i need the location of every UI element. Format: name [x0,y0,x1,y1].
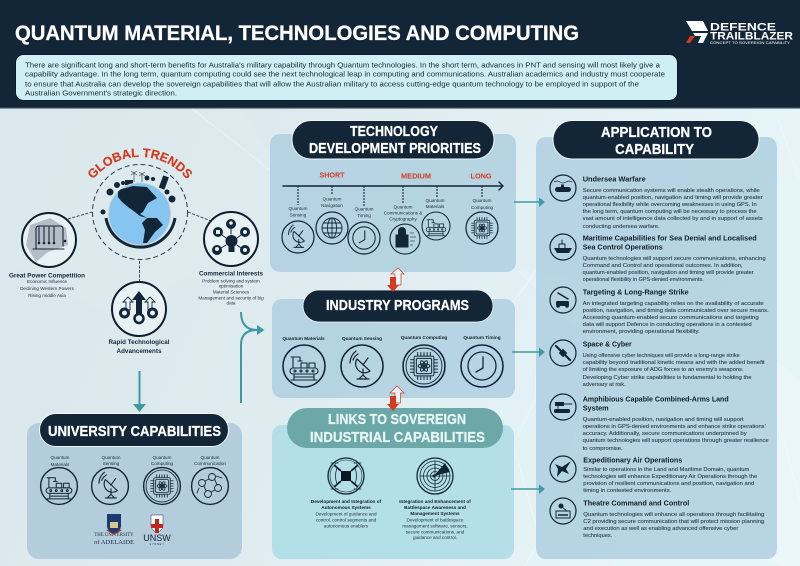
text: autonomous systems: Development of guidance and [315,512,377,516]
item: quantum timing [461,335,503,387]
item: quantum timing: Quantum [355,206,374,212]
item: theatre command and control: C2 providing secure communication that will protect mission planning [583,519,764,525]
item: undersea warfare: Secure communication systems will enable stealth operations, while [583,188,760,194]
item: targeting and long-range strike: Accessing quantum-enabled secure communications and targeting [583,315,759,321]
panel: technology development priorities [270,120,516,272]
heading pill: CAPABILITY [615,142,694,158]
heading pill: TECHNOLOGY [350,124,438,140]
icon: ship [550,234,576,260]
panel: links to sovereign industrial capabilities [272,408,514,559]
item: maritime capabilities: Maritime Capabilities for Sea Denial and Localised [583,234,757,242]
item: quantum computing [401,335,447,387]
item: amphibious combined-arms land system: Quantum-enabled position, navigation and timing will support [583,417,744,423]
item: expeditionary air operations: technologies will enhance Expeditionary Air Operations through the [583,474,757,480]
rapid technological advancements: Rapid Technological [108,339,170,346]
icon: quantum sensing [92,455,128,504]
item: quantum sensing: Quantum Sensing [342,336,382,341]
icon: quantum computing [144,455,180,504]
logo: Defence Trailblazer: TRAILBLAZER [710,30,793,42]
item: targeting and long-range strike: data will support Defence in conducting operations in a contested [583,322,752,328]
item: theatre command and control [550,498,764,539]
icon: quantum materials [41,455,77,504]
icon: quantum communication [192,455,228,504]
timeline arrow: MEDIUM [401,174,431,180]
item: amphibious combined-arms land system: operations in GPS-denied environments and enhance strike operations' [583,424,766,430]
arrows: industry programs and sovereign capabilities [387,386,404,411]
item: targeting and long-range strike: environment, providing operational flexibility. [583,329,700,335]
commercial interests: data [227,300,236,306]
heading: global trends arc: GLOBAL TRENDS [88,148,192,178]
logo: university of adelaide: of ADELAIDE [94,539,134,546]
heading pill: INDUSTRIAL CAPABILITIES [310,430,485,446]
item: space and cyber: Using offensive cyber techniques will provide a long-range strike [583,353,740,359]
item: maritime capabilities: Sea Control Operations [583,242,663,252]
panel: university capabilities [27,414,242,559]
icon: land vehicles [550,394,576,420]
text: battlespace awareness: Development of battlespace [407,518,464,522]
text: battlespace awareness [399,499,471,540]
arrows: priorities and industry programs [387,268,404,292]
item: theatre command and control: techniques. [583,533,613,539]
item: targeting and long-range strike [550,287,769,335]
rapid technological advancements: Advancements [116,348,162,355]
arrow: industry programs to application [512,348,545,357]
logo: Defence Trailblazer: DEFENCE [710,22,776,34]
item: quantum navigation: Quantum [323,196,342,202]
item: quantum materials [422,198,450,240]
logo: Defence Trailblazer [686,21,793,45]
item: quantum navigation: Navigation [321,203,343,208]
commercial interests: Material Sciences [213,290,250,294]
logo: university of adelaide [94,514,134,546]
item: space and cyber: adversary at risk. [583,382,626,388]
icon: radar [417,458,453,494]
title: QUANTUM MATERIAL, TECHNOLOGIES AND COMPUTING [15,21,579,45]
heading pill [287,408,503,448]
item: quantum timing [348,206,380,254]
text: battlespace awareness: guidance and control. [413,535,457,540]
heading pill [553,120,759,159]
commercial interests: Problem solving and system [202,278,260,284]
icon: quantum communication: Quantum [201,455,220,460]
icon: missile launcher [550,287,576,313]
text: battlespace awareness: Management Systems [410,511,460,516]
item: quantum sensing [341,336,383,387]
arrow: sovereign capabilities to application [511,484,545,494]
heading pill [303,290,493,322]
item: quantum communications and cryptography [384,204,422,254]
item: space and cyber: Developing Cyber strike capabilities is fundamental to holding the [583,375,752,381]
intro text box: to ensure that Australia can develop the sovereign capabilities that will allow the Australian military to access cutting-edge quantum technology to be employed in support of the [25,80,639,88]
item: targeting and long-range strike: An integrated targeting capability relies on the availability of accurate [583,301,764,307]
item: quantum sensing [282,206,314,253]
rapid technological advancements [108,282,170,355]
arrow: trends and universities to industry programs [241,312,264,403]
item: undersea warfare: conducting undersea warfare. [583,224,660,230]
item: theatre command and control: and execution as well as enabling advanced offensive cyber [583,526,738,532]
heading pill: LINKS TO SOVEREIGN [328,412,466,428]
commercial interests [198,212,264,306]
item: amphibious combined-arms land system: accuracy. Additionally, secure communications underpinned by [583,431,747,437]
icon: quantum communication: Communication [194,461,226,466]
item: targeting and long-range strike: position, navigation, and timing data communicated over secure means. [583,308,769,314]
text: autonomous systems: Development and Integration of [311,499,382,504]
heading pill: DEVELOPMENT PRIORITIES [309,141,481,157]
item: quantum sensing: Sensing [290,212,307,218]
item: maritime capabilities: operational flexibility in GPS-denied environments. [583,277,704,283]
item: quantum materials: Quantum [426,198,445,203]
item: quantum computing: Computing [471,205,494,210]
text: battlespace awareness: Battlespace Awareness and [404,505,466,510]
logo: university of adelaide: THE UNIVERSITY [94,533,134,538]
arrow: trends to university capabilities [133,371,146,412]
intro text box [16,54,678,100]
logo: UNSW [143,515,171,546]
item: quantum timing: Timing [357,213,371,218]
item: undersea warfare: vast amount of intelligence data collected by and in support of assets [583,216,763,222]
item: quantum communications and cryptography: Quantum [394,204,413,210]
item: expeditionary air operations: Expeditionary Air Operations [583,456,682,464]
icon: quantum materials: Quantum [51,455,70,460]
item: quantum materials: Quantum Materials [282,336,325,341]
timeline arrow: SHORT [320,172,345,180]
great power competition: Declining Western Powers [20,286,75,291]
item: quantum computing [466,198,498,244]
great power competition [9,213,85,298]
item: expeditionary air operations: timing in contested environments. [583,488,672,494]
text: battlespace awareness: Integration and Enhancement of [399,499,471,504]
item: amphibious combined-arms land system: quantum technologies will support operations through greater resilience [583,438,769,444]
item: space and cyber: Space & Cyber [583,340,632,348]
heading pill: INDUSTRY PROGRAMS [326,298,469,314]
logo: Defence Trailblazer: CONCEPT TO SOVEREIGN CAPABILITY [710,40,790,45]
great power competition: Great Power Competition [9,272,85,280]
item: theatre command and control: Quantum technologies will enhance all operations through facilitating [583,512,764,518]
item: expeditionary air operations: provision of resilient communications and position, navigation and [583,481,754,487]
globe icon [92,164,188,260]
logo: UNSW: SYDNEY [149,543,165,546]
intro text box: Australian Government's strategic direction. [25,88,177,98]
item: expeditionary air operations: Similar to operations in the Land and Maritime Domain, quantum [583,467,750,473]
item: quantum computing: Quantum Computing [401,335,447,340]
connector lines [68,212,211,281]
item: space and cyber [550,340,765,388]
intro text box: capability advantage. In the long term, quantum computing could see the next technological leap in computing and communications. Australian academics and industry must cooperate [25,70,665,78]
item: quantum timing: Quantum Timing [463,335,501,340]
item: quantum communications and cryptography: Cryptography [389,216,417,222]
item: theatre command and control: Theatre Command and Control [583,498,689,508]
item: space and cyber: capability beyond traditional kinetic means and with the added benefit [583,360,765,366]
item: undersea warfare [550,174,763,230]
panel: industry programs [272,290,515,398]
item: undersea warfare: the long term, quantum computing will be necessary to process the [583,209,757,215]
item: space and cyber: of limiting the exposure of ADG forces to an enemy's weapons. [583,367,744,373]
item: quantum materials [282,336,325,387]
arrow: technology priorities to application [514,198,545,207]
item: amphibious combined-arms land system: System [583,404,609,412]
icon: quantum sensing: Sensing [103,461,120,466]
icon: quantum sensing: Quantum [102,455,121,460]
icon: drone [328,458,364,494]
commercial interests: optimisation [219,284,244,288]
icon: submarine [550,175,576,201]
icon: command post [550,498,576,524]
icon: quantum computing: Quantum [153,455,172,460]
item: maritime capabilities [550,234,766,283]
icon: satellite [550,340,576,366]
icon: aircraft [550,456,576,482]
commercial interests: Commercial Interests [199,270,263,278]
great power competition: Economic Influence [27,279,67,284]
item: maritime capabilities: Command and Control and operational outcomes. In addition, [583,263,743,269]
item: quantum communications and cryptography: Communications & [384,210,422,216]
item: undersea warfare: operational flexibility while overcoming weaknesses in using GPS. In [583,202,757,208]
heading pill [40,414,228,446]
item: maritime capabilities: Quantum technologies will support secure communications, enhancing [583,256,766,262]
text: battlespace awareness: secure communications, and [406,530,465,534]
item: quantum materials: Materials [426,204,445,209]
item: undersea warfare: Undersea Warfare [583,174,646,184]
item: expeditionary air operations [550,456,757,494]
text: autonomous systems: control, control segments and [316,518,377,522]
item: amphibious combined-arms land system: Amphibious Capable Combined-Arms Land [583,394,729,404]
item: maritime capabilities: quantum-enabled position, navigation and timing will provide greater [583,270,754,276]
timeline arrow: LONG [470,174,492,180]
item: targeting and long-range strike: Targeting & Long-Range Strike [583,288,689,296]
great power competition: Rising middle Asia [28,293,66,298]
panel: application to capability [536,120,777,559]
item: quantum navigation [316,196,348,244]
text: autonomous systems: Autonomous Systems [321,505,371,510]
commercial interests: Management and security of big [198,296,264,300]
text: autonomous systems: autonomous enablers [324,524,369,528]
heading pill: UNIVERSITY CAPABILITIES [48,424,221,440]
item: amphibious combined-arms land system: to compromise. [583,446,623,452]
intro text box: There are significant long and short-term benefits for Australia's military capability through Quantum technologies. In the short term, advances in PNT and sensing will most likely give a [25,60,661,70]
icon: quantum materials: Materials [51,462,70,467]
logo: UNSW: UNSW [143,533,171,543]
header band [0,0,800,108]
item: undersea warfare: quantum-enabled position, navigation and timing will provide greater [583,195,763,201]
item: quantum computing: Quantum [473,198,492,203]
heading pill [292,120,494,159]
text: autonomous systems [311,499,382,528]
item: amphibious combined-arms land system [550,394,769,452]
heading pill: APPLICATION TO [601,125,712,141]
global trends diagram [9,148,264,355]
text: battlespace awareness: management software, sensors, [402,524,468,528]
icon: quantum computing: Computing [151,461,174,466]
timeline arrow [283,172,503,206]
item: quantum sensing: Quantum [289,206,308,211]
